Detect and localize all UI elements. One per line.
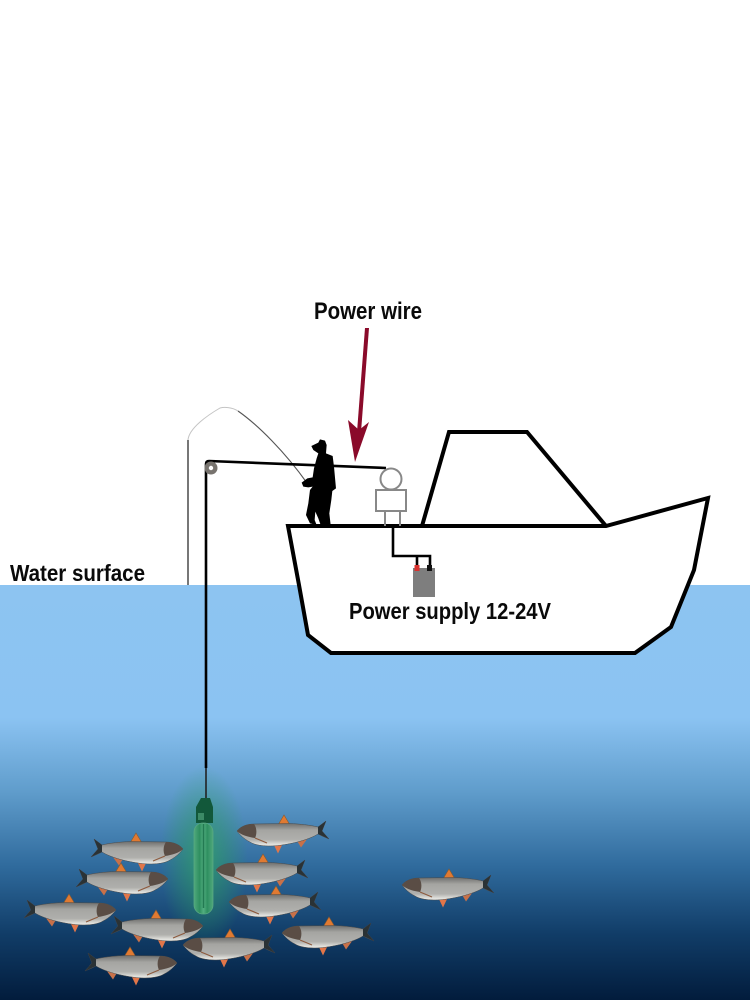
fish 1 (237, 815, 329, 854)
boat (288, 432, 708, 653)
lamp cord end (205, 768, 207, 800)
fish 3 (229, 886, 321, 924)
lamp cap (196, 798, 213, 823)
lamp tube (194, 823, 213, 914)
fisherman (302, 439, 336, 525)
boat hull (288, 498, 708, 653)
fish 2 (216, 854, 308, 892)
fish 9 (111, 910, 203, 948)
battery (413, 565, 435, 597)
fish 8 (24, 894, 116, 932)
fish 10 (85, 947, 177, 986)
fish 6 (91, 833, 183, 872)
supply wires (393, 526, 430, 566)
label: power wire: Power wire (314, 298, 422, 325)
water (0, 585, 750, 1000)
fish 7 (76, 863, 168, 902)
label: power supply: Power supply 12-24V (349, 598, 552, 624)
fish school (24, 815, 374, 986)
pulley (204, 462, 218, 474)
winch reel (380, 468, 402, 490)
fish 5 (282, 917, 374, 956)
fish 4 (183, 929, 275, 968)
fishing pole line (188, 407, 307, 585)
winch (376, 468, 406, 526)
boat cabin (422, 432, 606, 526)
heading: water surface: Water surface (10, 560, 145, 586)
power wire (206, 461, 386, 768)
winch box (376, 490, 406, 511)
lamp (194, 768, 213, 914)
lone fish (402, 869, 494, 908)
green glow (160, 766, 248, 950)
arrow (348, 328, 369, 462)
